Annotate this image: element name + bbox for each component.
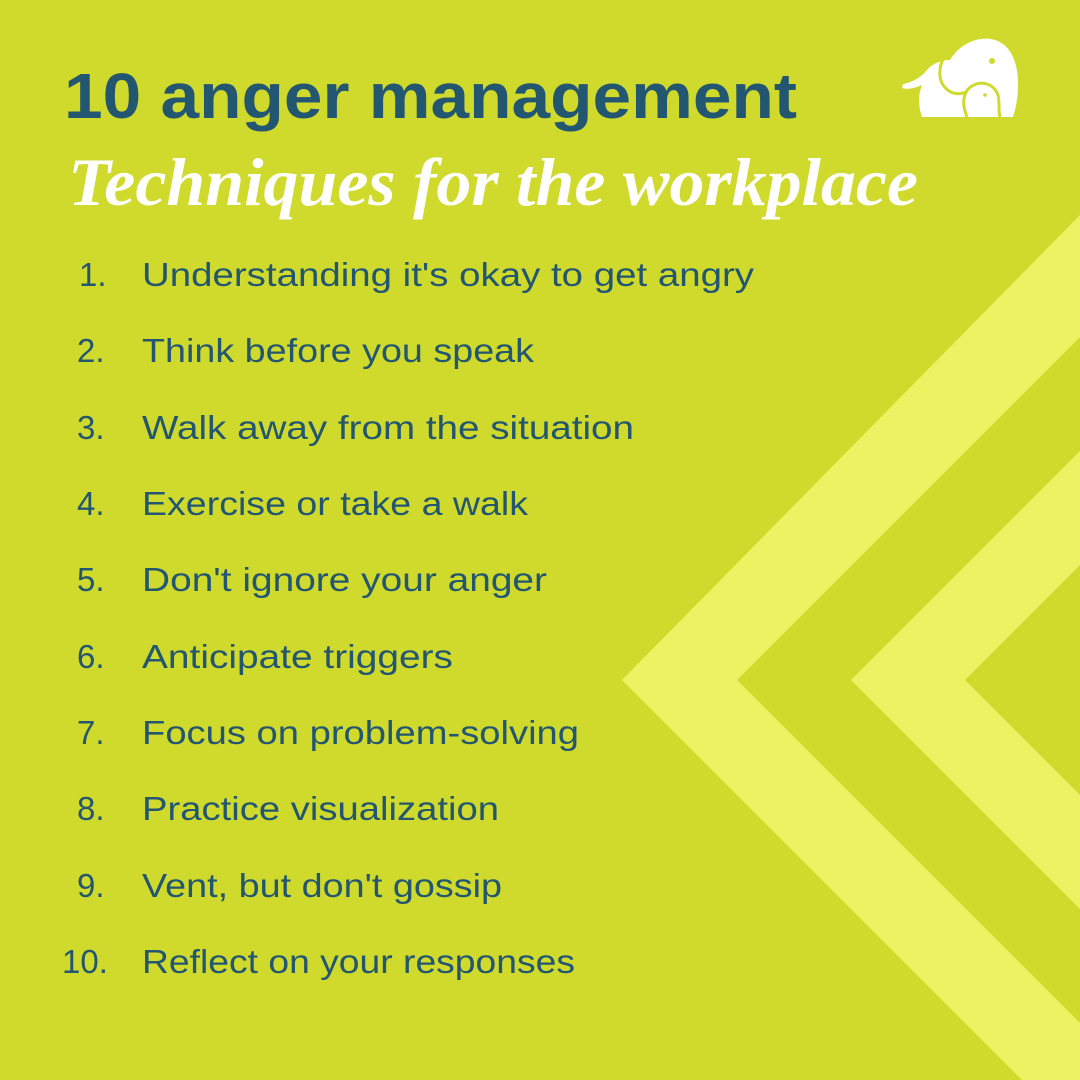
item 3: 3. <box>77 409 105 446</box>
item 4: Exercise or take a walk <box>142 485 529 522</box>
item 8: Practice visualization <box>142 790 499 827</box>
item 8: 8. <box>77 790 105 827</box>
item 7: 7. <box>77 714 105 751</box>
item 3: Walk away from the situation <box>142 409 634 446</box>
item 10: Reflect on your responses <box>142 943 575 980</box>
item 1: Understanding it's okay to get angry <box>142 256 755 293</box>
chevron stripes background <box>622 215 1080 1080</box>
item 6: 6. <box>77 638 105 675</box>
item 9: Vent, but don't gossip <box>142 867 502 904</box>
item 9: 9. <box>77 867 105 904</box>
title: 10 anger management <box>64 60 797 132</box>
item 5: Don't ignore your anger <box>142 561 547 598</box>
item 7: Focus on problem-solving <box>142 714 579 751</box>
item 6: Anticipate triggers <box>142 638 453 675</box>
item 4: 4. <box>77 485 105 522</box>
item 2: Think before you speak <box>142 332 535 369</box>
item 5: 5. <box>77 561 105 598</box>
list of techniques <box>62 256 755 980</box>
item 1: 1. <box>79 256 107 293</box>
item 2: 2. <box>77 332 105 369</box>
item 10: 10. <box>62 943 108 980</box>
subtitle: Techniques for the workplace <box>68 144 918 220</box>
icon: elephant logo <box>902 39 1018 117</box>
